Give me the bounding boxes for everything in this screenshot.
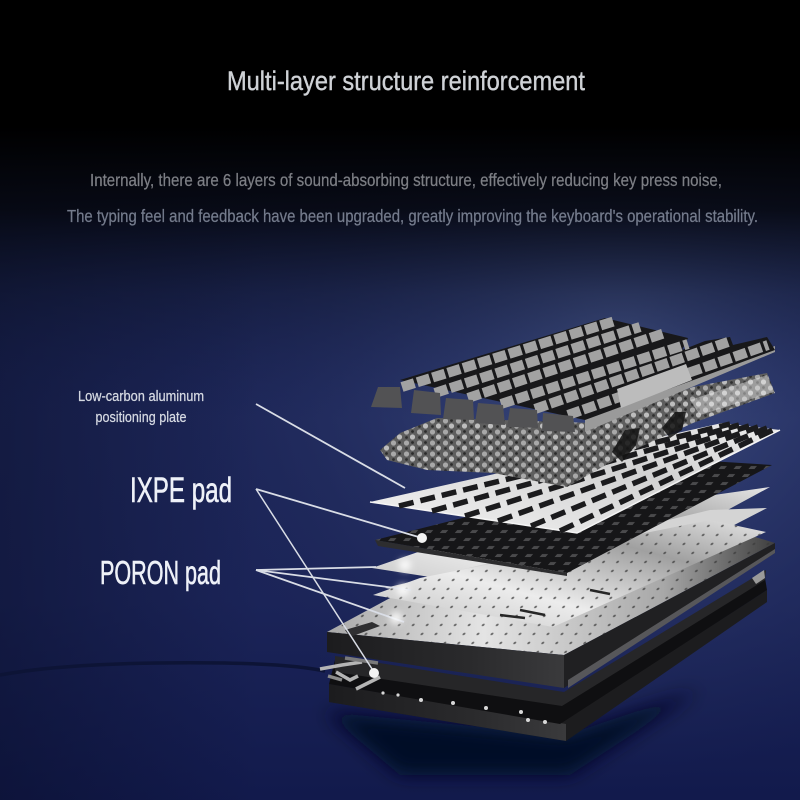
label: low-carbon aluminum positioning plate xyxy=(78,389,204,426)
title: Multi-layer structure reinforcement xyxy=(227,66,585,96)
PORON pad 1 xyxy=(372,487,770,598)
screw dots xyxy=(381,691,547,724)
label: PORON pad: PORON pad xyxy=(100,554,221,591)
layer: PCB xyxy=(335,570,766,706)
label: IXPE pad: IXPE pad xyxy=(130,471,232,510)
PORON pad 3 xyxy=(373,520,766,627)
cable xyxy=(0,663,325,675)
layer: IXPE pad xyxy=(375,460,772,576)
keycap front side band xyxy=(585,346,775,432)
keycap rows xyxy=(402,321,768,415)
plate cut-outs xyxy=(399,424,775,531)
keycap base xyxy=(400,318,775,420)
label: low-carbon aluminum positioning plate: Low-carbon aluminum xyxy=(78,389,204,405)
keyboard shadow xyxy=(325,690,700,775)
layer: keycaps xyxy=(371,318,775,432)
layer: PORON pads xyxy=(372,487,770,627)
PORON pad 2 xyxy=(385,508,767,615)
marker dots xyxy=(369,533,427,678)
space bar xyxy=(617,364,692,408)
layer: plate case xyxy=(327,520,775,688)
label: low-carbon aluminum positioning plate: positioning plate xyxy=(96,410,186,426)
USB connector xyxy=(320,658,380,689)
keycap row ends xyxy=(371,387,575,432)
layer: aluminum positioning plate xyxy=(370,423,780,533)
layer: switches xyxy=(380,373,775,487)
layer: bottom case xyxy=(329,572,767,741)
description text xyxy=(67,170,758,226)
leader lines xyxy=(256,404,422,672)
